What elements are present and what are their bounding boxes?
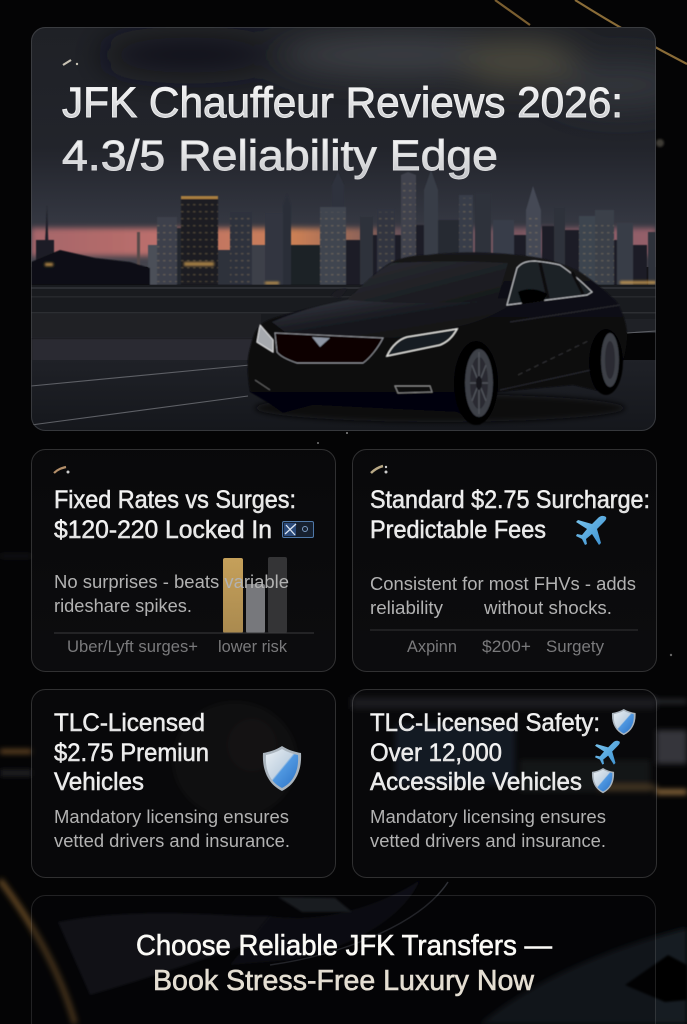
hero title	[62, 79, 623, 180]
body text: reliability	[370, 597, 444, 618]
heading: $120-220 Locked In	[54, 516, 272, 544]
body text	[370, 806, 606, 851]
card mark	[371, 466, 388, 474]
icon: plane	[595, 741, 620, 765]
icon: plane	[576, 516, 606, 545]
hero small mark	[63, 60, 78, 65]
heading: Fixed Rates vs Surges:	[54, 486, 296, 514]
footer labels: lower risk	[218, 638, 288, 656]
icon: shield	[263, 746, 301, 791]
call to action text	[136, 930, 552, 997]
bar chart	[223, 557, 287, 633]
heading	[370, 709, 600, 796]
body text	[54, 571, 289, 616]
bridge rail and road	[31, 285, 656, 324]
icon: ticket	[282, 522, 314, 538]
call to action text: Book Stress-Free Luxury Now	[153, 965, 535, 997]
panel: TLC premium vehicles	[32, 690, 336, 878]
footer labels: $200+	[482, 638, 531, 656]
body text: Mandatory licensing ensures	[370, 806, 606, 827]
panel: fixed rates	[32, 450, 336, 672]
car	[248, 252, 627, 425]
heading	[54, 486, 296, 544]
footer labels: Uber/Lyft surges+	[67, 638, 198, 656]
hero title: 4.3/5 Reliability Edge	[62, 132, 498, 180]
icon: shield lower	[592, 768, 614, 793]
heading: $2.75 Premiun	[54, 739, 209, 767]
call to action text: Choose Reliable JFK Transfers —	[136, 930, 552, 962]
body text: without shocks.	[483, 597, 612, 618]
hero title: JFK Chauffeur Reviews 2026:	[62, 79, 623, 127]
heading: Accessible Vehicles	[370, 768, 582, 796]
body text: No surprises - beats variable	[54, 571, 289, 592]
hero panel with skyline and car	[31, 27, 687, 431]
footer labels	[67, 638, 288, 656]
body text: rideshare spikes.	[54, 595, 192, 616]
panel: TLC safety	[352, 690, 656, 878]
card mark	[54, 467, 70, 474]
sky	[31, 27, 656, 267]
body text: vetted drivers and insurance.	[54, 830, 290, 851]
skyline	[31, 170, 656, 285]
footer labels: Axpinn	[407, 638, 457, 656]
heading: Predictable Fees	[370, 516, 546, 544]
heading: TLC-Licensed	[54, 709, 205, 737]
heading	[54, 709, 209, 796]
panel: standard surcharge	[352, 450, 656, 672]
body text: Consistent for most FHVs - adds	[370, 573, 636, 594]
body text: Mandatory licensing ensures	[54, 806, 289, 827]
heading	[370, 486, 650, 544]
body text	[54, 806, 290, 851]
icon: shield top	[612, 709, 636, 735]
footer labels: Surgety	[546, 638, 605, 656]
panel: call to action	[32, 896, 656, 1024]
heading: Standard $2.75 Surcharge:	[370, 486, 650, 514]
body text	[370, 573, 636, 618]
body text: vetted drivers and insurance.	[370, 830, 606, 851]
footer labels	[407, 638, 605, 656]
heading: Vehicles	[54, 768, 144, 796]
heading: Over 12,000	[370, 739, 502, 767]
heading: TLC-Licensed Safety:	[370, 709, 600, 737]
